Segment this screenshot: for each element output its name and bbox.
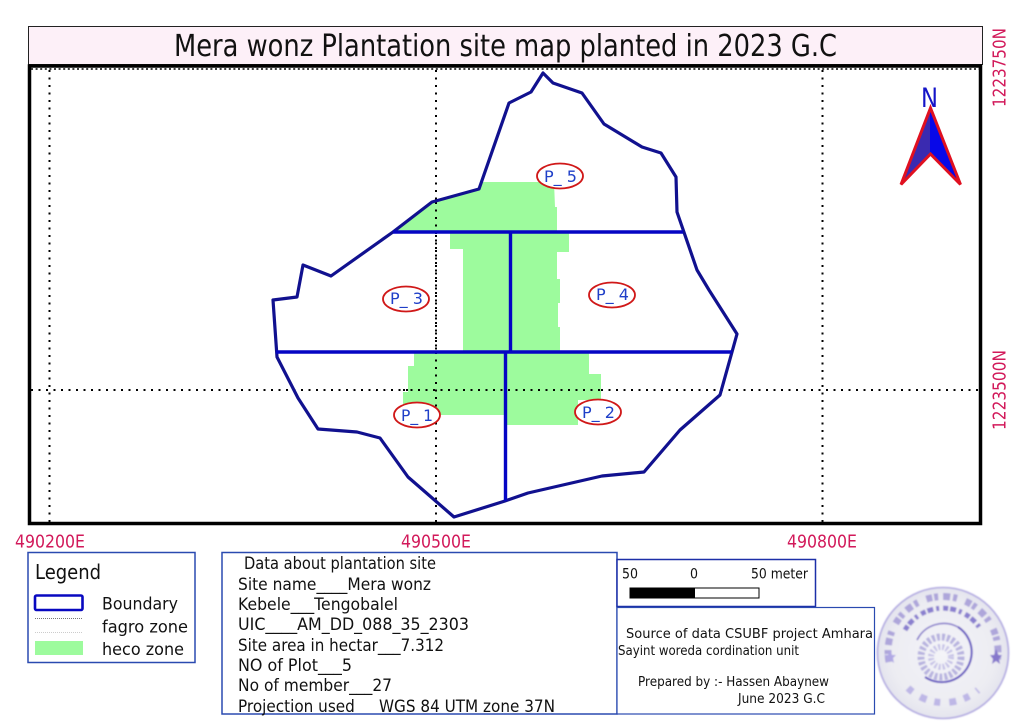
title: Mera wonz Plantation site map planted in 2023 G.C xyxy=(174,29,837,64)
coordinate label 490200E: 490200E xyxy=(15,532,85,552)
panel: source and preparer: Prepared by :- Hassen Abaynew xyxy=(638,675,829,690)
plot label P_2: P_ 2 xyxy=(582,403,615,423)
coordinate label 1223750N: 1223750N xyxy=(990,28,1010,107)
panel: data about plantation site: No of member___27 xyxy=(238,676,392,696)
site boundary xyxy=(273,73,737,517)
panel: data about plantation site: Projection used WGS 84 UTM zone 37N xyxy=(238,697,555,717)
coordinate label 490500E: 490500E xyxy=(401,532,471,552)
panel: source and preparer: Source of data CSUBF project Amhara xyxy=(626,627,873,642)
plot label P_1 xyxy=(394,402,440,428)
panel: data about plantation site: Kebele___Tengobalel xyxy=(238,595,398,615)
panel: data about plantation site: UIC____AM_DD_088_35_2303 xyxy=(238,615,469,635)
panel: map frame xyxy=(30,66,980,524)
panel: scale bar xyxy=(617,560,816,606)
panel: scale bar: 0 xyxy=(690,566,698,582)
panel: legend xyxy=(28,552,195,662)
panel: source and preparer: June 2023 G.C xyxy=(737,692,825,707)
panel: source and preparer xyxy=(617,608,874,714)
coordinate label 1223500N: 1223500N xyxy=(990,350,1010,430)
plot label P_2 xyxy=(575,400,621,424)
plot label P_3: P_ 3 xyxy=(390,289,423,309)
legend item: boundary xyxy=(35,594,178,614)
panel: scale bar: 50 meter xyxy=(751,566,808,582)
plot label P_5: P_ 5 xyxy=(544,167,577,187)
coordinate label 490800E: 490800E xyxy=(787,532,857,552)
panel: data about plantation site: NO of Plot___5 xyxy=(238,656,352,676)
legend item: fagro zone: fagro zone xyxy=(102,618,188,638)
legend item: heco zone xyxy=(35,640,184,660)
icon: north arrow xyxy=(901,83,960,184)
icon: north arrow: N xyxy=(921,83,938,114)
panel: data about plantation site: Site name____Mera wonz xyxy=(238,575,431,595)
plot label P_3 xyxy=(383,286,429,312)
panel: scale bar: 50 xyxy=(622,566,638,582)
panel: legend: Legend xyxy=(35,560,101,584)
plot label P_5 xyxy=(537,164,583,188)
panel: data about plantation site: Site area in hectar___7.312 xyxy=(238,636,444,656)
plot label P_4 xyxy=(589,282,635,308)
heco zone planting area xyxy=(393,182,601,425)
panel: data about plantation site: Data about plantation site xyxy=(244,554,436,574)
plot label P_1: P_ 1 xyxy=(401,406,433,426)
plot label P_4: P_ 4 xyxy=(596,285,629,305)
icon: official stamp xyxy=(878,588,1008,718)
legend item: boundary: Boundary xyxy=(102,594,178,614)
panel: data about plantation site xyxy=(222,552,617,717)
legend item: heco zone: heco zone xyxy=(102,640,184,660)
plot dividing lines xyxy=(276,232,732,501)
panel: source and preparer: Sayint woreda cordination unit xyxy=(618,644,799,659)
